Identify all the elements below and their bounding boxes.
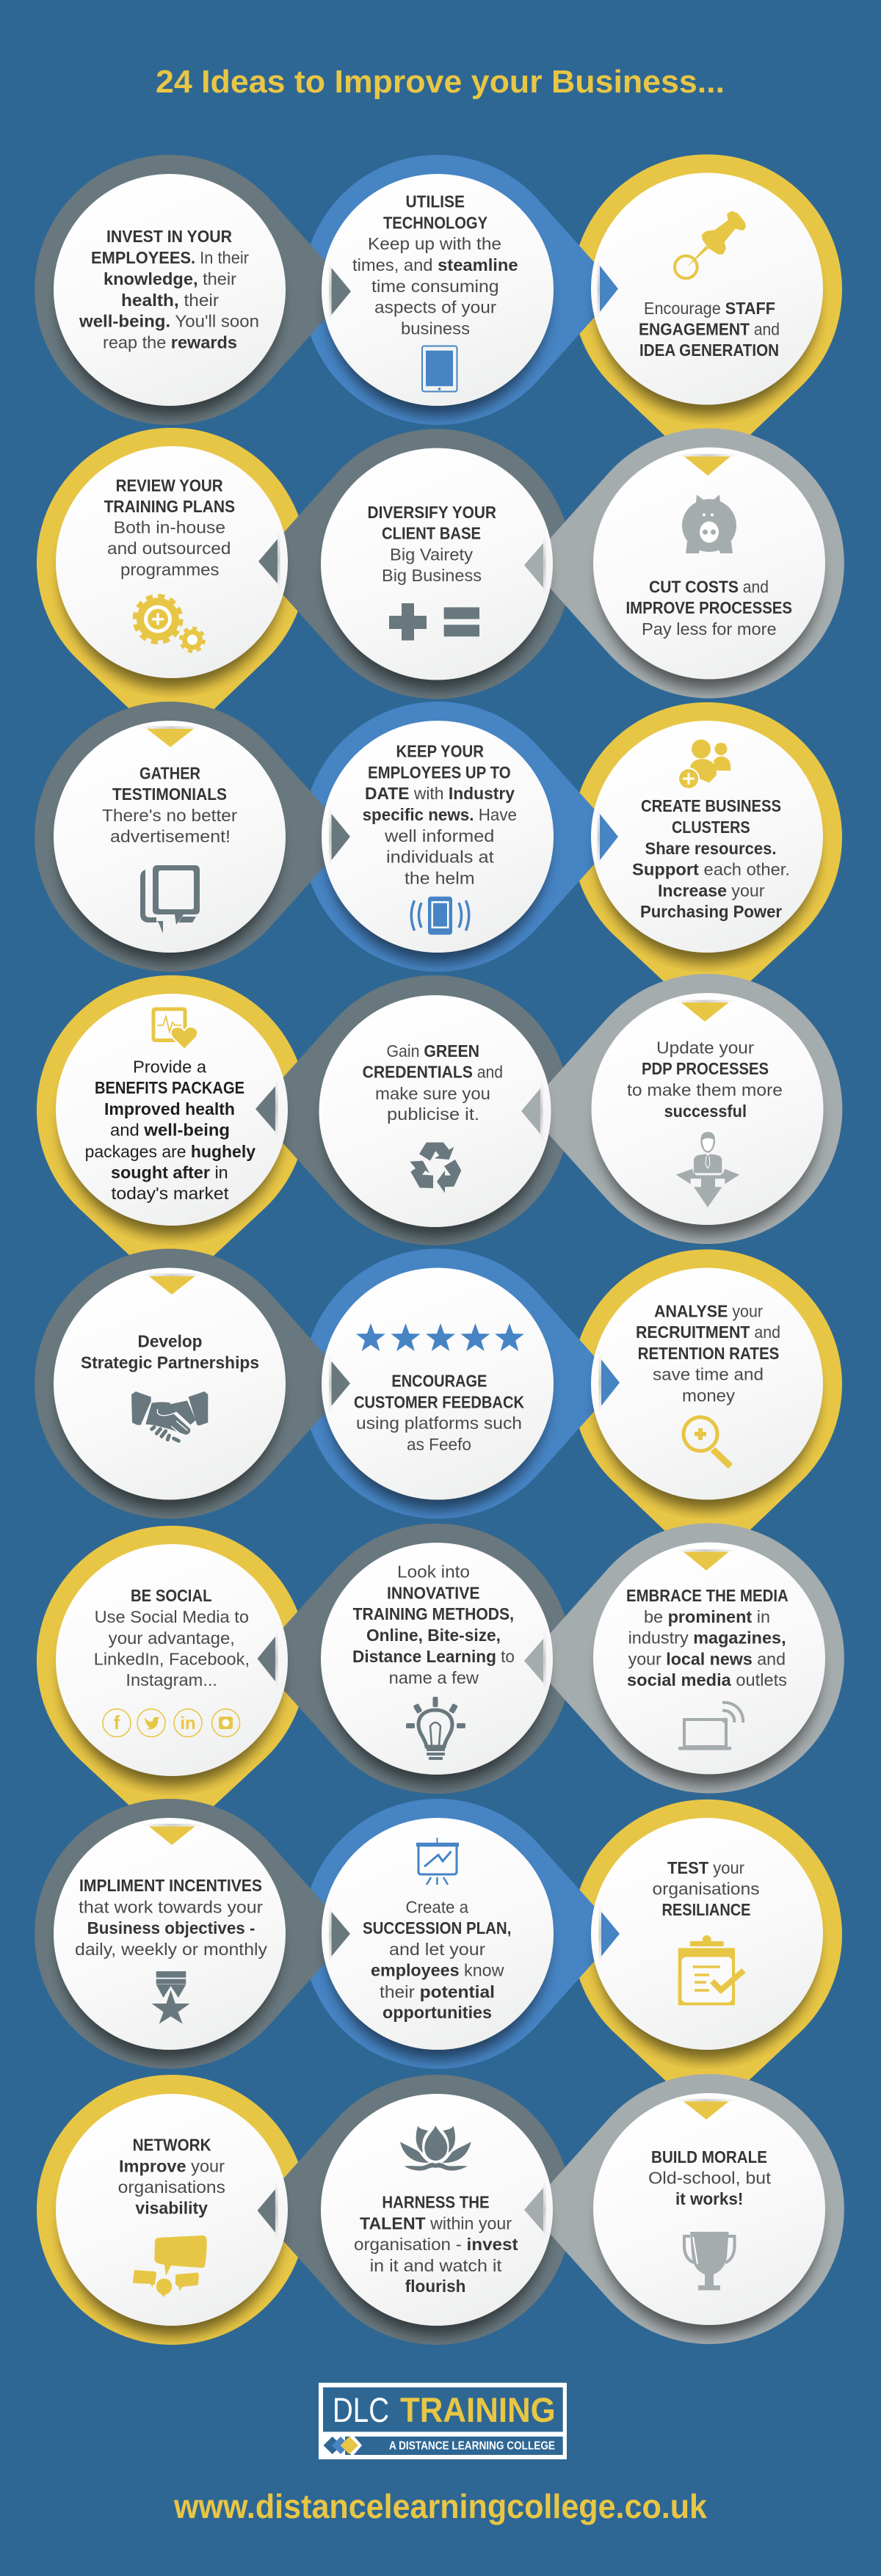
text: harness: HARNESS THE (382, 2193, 490, 2212)
ring: yellow teardrop row 2 (37, 428, 307, 749)
text: green credentials: Gain GREEN (386, 1041, 479, 1060)
text: invest (79, 227, 259, 352)
text: invest: INVEST IN YOUR (106, 227, 232, 246)
text: utilise: times, and steamline (352, 255, 518, 274)
text: utilise: time consuming (371, 277, 499, 296)
text: keep employees: the helm (405, 869, 475, 888)
icon: social media circles: f (114, 1711, 120, 1733)
text: utilise: aspects of your (374, 298, 496, 317)
icon: recycle (410, 1143, 461, 1193)
text: keep employees: specific news. Have (363, 805, 517, 824)
panel: innovative training methods (321, 1543, 553, 1785)
icon: five stars (356, 1323, 524, 1351)
text: utilise: TECHNOLOGY (383, 214, 487, 233)
panel: recruitment and retention (591, 1268, 823, 1510)
logo: DLC Training: DLC (333, 2390, 389, 2429)
text: harness: TALENT within your (360, 2214, 512, 2233)
text: incentives (75, 1876, 268, 1959)
ring: blue teardrop row 5 (302, 1249, 619, 1519)
panel: incentives (54, 1818, 286, 2060)
icon: people group (678, 740, 730, 790)
arrow: yellow into partnerships (142, 1274, 203, 1295)
text: network (118, 2135, 225, 2217)
ring: grey teardrop row 2 (255, 429, 572, 699)
text: review: programmes (120, 560, 219, 579)
arrow: light grey into harness (524, 2180, 546, 2239)
ring: yellow teardrop row 7 (572, 1800, 842, 2120)
panel: customer feedback (322, 1268, 554, 1510)
ring: grey teardrop row 1 (35, 155, 351, 425)
text: green credentials (363, 1041, 503, 1124)
arrow: grey into utilise (329, 261, 351, 323)
text: invest: knowledge, their (104, 269, 236, 288)
text: pdp: to make them more (627, 1080, 783, 1099)
logo: DLC Training: A DISTANCE LEARNING COLLEGE (389, 2440, 555, 2453)
ring: light grey teardrop row 8 (528, 2074, 844, 2344)
text: benefits: sought after in (111, 1163, 228, 1182)
text: resilience: RESILIANCE (662, 1900, 750, 1919)
text: morale: Old-school, but (648, 2169, 772, 2188)
arrow: grey into network (257, 2182, 278, 2240)
ring: yellow teardrop row 4 (37, 975, 307, 1295)
ring: blue teardrop row 3 (302, 702, 619, 972)
icon: medal (152, 1971, 190, 2024)
text: testimonials: GATHER (139, 764, 200, 783)
text: green credentials: CREDENTIALS and (363, 1063, 503, 1082)
text: feedback: CUSTOMER FEEDBACK (354, 1393, 524, 1412)
ring: grey teardrop row 4 (254, 975, 570, 1245)
icon: piggy bank (682, 495, 736, 553)
text: be social: Use Social Media to (95, 1607, 249, 1626)
text: invest: reap the rewards (103, 333, 237, 352)
text: clusters: Increase your (658, 881, 765, 900)
text: media: EMBRACE THE MEDIA (626, 1586, 788, 1605)
text: diversify: DIVERSIFY YOUR (367, 503, 496, 522)
panel: strategic partnerships (54, 1268, 286, 1510)
text: be social: LinkedIn, Facebook, (94, 1650, 250, 1669)
arrow: light grey into green credentials (521, 1081, 543, 1141)
ring: grey teardrop row 7 (35, 1799, 351, 2069)
panel: review training plans (56, 446, 288, 688)
icon: businessman at crossroads (676, 1132, 739, 1207)
ring: yellow circle row 8 (37, 2075, 307, 2345)
arrow: yellow into media (676, 1549, 736, 1571)
text: incentives: daily, weekly or monthly (75, 1940, 268, 1959)
text: clusters: Support each other. (632, 860, 790, 879)
text: keep employees (363, 742, 517, 888)
text: innovative: TRAINING METHODS, (353, 1604, 514, 1623)
panel: diversify client base (321, 448, 553, 690)
ring: grey teardrop row 5 (35, 1249, 351, 1519)
text: recruitment: money (682, 1386, 736, 1405)
text: staff engagement (639, 299, 780, 360)
icon: trophy (684, 2232, 734, 2291)
arrow: light grey into innovative (524, 1631, 546, 1690)
arrow: blue into staff engagement (598, 258, 618, 320)
panel: succession plan (322, 1818, 554, 2060)
text: clusters: Share resources. (645, 839, 777, 858)
text: media: industry magazines, (628, 1628, 786, 1647)
text: benefits: and well-being (110, 1121, 230, 1140)
text: succession: opportunities (383, 2003, 492, 2022)
title: 24 Ideas to Improve your Business... (156, 64, 725, 100)
text: cut costs: IMPROVE PROCESSES (626, 598, 792, 617)
text: benefits: today's market (112, 1184, 229, 1203)
panel: harness the talent (321, 2094, 553, 2336)
ring: grey teardrop row 8 (255, 2075, 572, 2345)
text: partnerships: Develop (138, 1332, 203, 1351)
text: media: your local news and (628, 1650, 786, 1669)
arrow: light grey into diversify (524, 536, 546, 595)
panel: network (56, 2094, 288, 2336)
text: harness (354, 2193, 518, 2296)
arrow: grey into be social (257, 1629, 278, 1689)
text: testimonials (102, 764, 237, 845)
arrow: grey into review (258, 531, 280, 591)
text: diversify: Big Vairety (390, 545, 474, 564)
text: harness: in it and watch it (370, 2256, 502, 2275)
text: clusters: CLUSTERS (672, 818, 750, 837)
text: innovative: Online, Bite-size, (366, 1626, 501, 1645)
ring: light grey teardrop row 4 (526, 974, 842, 1244)
ring: yellow teardrop row 6 (37, 1526, 307, 1845)
text: incentives: that work towards your (79, 1897, 263, 1916)
text: network: visability (135, 2198, 208, 2217)
logo: DLC Training: TRAINING (400, 2390, 556, 2429)
ring: light grey teardrop row 6 (528, 1524, 844, 1794)
ring: yellow teardrop row 3 (572, 702, 842, 1022)
text: incentives: Business objectives - (87, 1918, 255, 1938)
arrow: grey into succession (329, 1904, 350, 1964)
text: succession (363, 1897, 511, 2022)
text: utilise (352, 192, 518, 338)
text: feedback (354, 1371, 524, 1454)
text: clusters (632, 796, 790, 921)
text: recruitment: RETENTION RATES (638, 1344, 779, 1363)
panel: benefits package (56, 994, 288, 1236)
icon: ringing phone (411, 897, 469, 935)
text: feedback: using platforms such (356, 1413, 522, 1433)
icon: health monitor and heart (153, 1009, 197, 1049)
text: innovative: Distance Learning to (352, 1647, 515, 1666)
text: innovative: name a few (389, 1668, 479, 1687)
panel: test resilience (591, 1818, 823, 2060)
text: staff engagement: Encourage STAFF (644, 299, 775, 318)
text: pdp (627, 1038, 783, 1121)
icon: presentation easel (416, 1838, 459, 1885)
panel: keep employees up to date (322, 721, 554, 963)
text: utilise: UTILISE (405, 192, 465, 211)
text: harness: organisation - invest (354, 2235, 518, 2254)
text: diversify (367, 503, 496, 585)
arrow: grey into keep employees (329, 807, 350, 867)
icon: tablet (422, 346, 457, 392)
icon: laptop with wifi (678, 1703, 743, 1750)
text: recruitment (636, 1301, 780, 1405)
text: resilience: TEST your (667, 1858, 744, 1877)
text: morale: it works! (675, 2189, 743, 2208)
text: recruitment: RECRUITMENT and (636, 1322, 780, 1342)
text: keep employees: well informed (384, 826, 494, 845)
text: pdp: Update your (656, 1038, 754, 1058)
text: keep employees: individuals at (386, 848, 494, 867)
icon: push pin (675, 211, 746, 278)
text: staff engagement: ENGAGEMENT and (639, 320, 780, 339)
text: review: TRAINING PLANS (104, 497, 235, 516)
text: innovative (352, 1562, 515, 1687)
text: feedback: as Feefo (407, 1435, 471, 1454)
icon: lotus flower (400, 2125, 471, 2171)
text: partnerships (81, 1332, 259, 1372)
text: testimonials: advertisement! (110, 826, 231, 845)
logo: DLC Training (319, 2383, 567, 2459)
text: succession: SUCCESSION PLAN, (363, 1918, 511, 1938)
text: recruitment: save time and (653, 1365, 764, 1384)
text: testimonials: TESTIMONIALS (112, 785, 227, 804)
text: harness: flourish (405, 2277, 465, 2296)
text: resilience: organisations (652, 1880, 759, 1899)
panel: utilise technology (322, 174, 554, 416)
text: review: and outsourced (107, 539, 231, 558)
icon: gears (135, 597, 204, 651)
website url: www.distancelearningcollege.co.uk (173, 2487, 707, 2525)
text: media: be prominent in (644, 1607, 770, 1626)
icon: light bulb (406, 1697, 465, 1760)
arrow: grey into benefits (255, 1079, 278, 1139)
text: benefits: BENEFITS PACKAGE (95, 1078, 244, 1097)
ring: grey teardrop row 6 (255, 1524, 572, 1794)
panel: embrace the media (593, 1543, 825, 1785)
text: cut costs: Pay less for more (642, 619, 777, 638)
panel: green credentials (319, 995, 551, 1237)
panel: pdp processes (592, 993, 824, 1235)
text: staff engagement: IDEA GENERATION (639, 341, 779, 360)
text: feedback: ENCOURAGE (391, 1371, 487, 1390)
icon: magnifying glass (684, 1417, 730, 1466)
text: utilise: business (401, 319, 470, 338)
text: keep employees: EMPLOYEES UP TO (368, 763, 511, 782)
text: morale (648, 2147, 772, 2208)
text: media: social media outlets (627, 1670, 787, 1689)
text: be social: Instagram... (126, 1670, 217, 1689)
text: invest: well-being. You'll soon (79, 312, 259, 331)
arrow: grey into feedback (329, 1354, 350, 1413)
panel: staff engagement (591, 173, 823, 415)
text: invest: EMPLOYEES. In their (91, 248, 249, 267)
ring: light grey teardrop row 2 (528, 429, 844, 699)
text: review: Both in-house (114, 518, 225, 537)
icon: social media circles (103, 1709, 240, 1737)
icon: handshake (131, 1391, 208, 1441)
text: utilise: Keep up with the (368, 234, 501, 253)
text: network: Improve your (119, 2156, 225, 2175)
text: pdp: PDP PROCESSES (642, 1059, 769, 1078)
text: keep employees: DATE with Industry (365, 784, 515, 803)
text: benefits: packages are hughely (85, 1142, 255, 1161)
icon: plus and equals (389, 603, 479, 641)
panel: gather testimonials (54, 721, 286, 963)
text: testimonials: There's no better (102, 806, 237, 825)
text: resilience (652, 1858, 759, 1919)
text: diversify: Big Business (382, 566, 482, 585)
panel: business clusters (591, 721, 823, 963)
text: keep employees: KEEP YOUR (396, 742, 484, 761)
text: green credentials: make sure you (375, 1084, 490, 1103)
text: clusters: Purchasing Power (640, 902, 782, 921)
panel: be social (56, 1544, 288, 1786)
text: morale: BUILD MORALE (651, 2147, 767, 2166)
text: review: REVIEW YOUR (116, 476, 223, 495)
text: benefits: Improved health (104, 1099, 235, 1118)
text: media (626, 1586, 788, 1689)
text: be social (94, 1586, 250, 1689)
text: succession: their potential (380, 1982, 495, 2001)
text: succession: Create a (405, 1897, 468, 1916)
text: cut costs: CUT COSTS and (649, 578, 769, 597)
ring: blue teardrop row 1 (302, 155, 619, 425)
text: benefits: Provide a (133, 1057, 206, 1076)
ring: grey teardrop row 3 (35, 702, 351, 972)
text: benefits (85, 1057, 255, 1203)
icon: speech bubbles outline (140, 865, 200, 934)
text: incentives: IMPLIMENT INCENTIVES (79, 1876, 262, 1895)
panel: build morale (593, 2093, 825, 2335)
text: be social: BE SOCIAL (131, 1586, 211, 1605)
text: succession: and let your (389, 1940, 485, 1959)
arrow: yellow into pdp (674, 1000, 736, 1022)
text: recruitment: ANALYSE your (654, 1301, 763, 1320)
arrow: blue into resilience (599, 1904, 620, 1964)
icon: social media circles: in (180, 1714, 196, 1733)
text: pdp: successful (664, 1102, 747, 1121)
text: network: organisations (118, 2177, 225, 2197)
text: green credentials: publicise it. (387, 1105, 479, 1124)
text: diversify: CLIENT BASE (382, 524, 481, 543)
text: network: NETWORK (133, 2135, 211, 2154)
text: innovative: INNOVATIVE (387, 1583, 480, 1602)
text: succession: employees know (371, 1961, 504, 1980)
arrow: blue into clusters (598, 807, 618, 867)
arrow: yellow into morale (676, 2099, 736, 2120)
text: cut costs (626, 578, 792, 638)
text: partnerships: Strategic Partnerships (81, 1353, 259, 1372)
panel: cut costs (593, 448, 825, 690)
arrow: yellow into cut costs (677, 454, 739, 476)
text: innovative: Look into (397, 1562, 470, 1581)
ring: blue teardrop row 7 (302, 1799, 619, 2069)
text: clusters: CREATE BUSINESS (641, 796, 781, 815)
panel: invest in your employees (54, 174, 286, 416)
icon: clipboard with tick (678, 1935, 744, 2005)
arrow: yellow into testimonials (139, 727, 201, 747)
icon: speech bubbles (133, 2235, 207, 2297)
arrow: blue into recruitment (599, 1352, 620, 1413)
text: review (104, 476, 235, 579)
text: be social: your advantage, (109, 1629, 235, 1648)
arrow: yellow into incentives (142, 1824, 203, 1845)
ring: yellow teardrop row 5 (572, 1249, 842, 1571)
text: invest: health, their (121, 291, 219, 310)
ring: yellow teardrop row 1 (572, 154, 842, 476)
